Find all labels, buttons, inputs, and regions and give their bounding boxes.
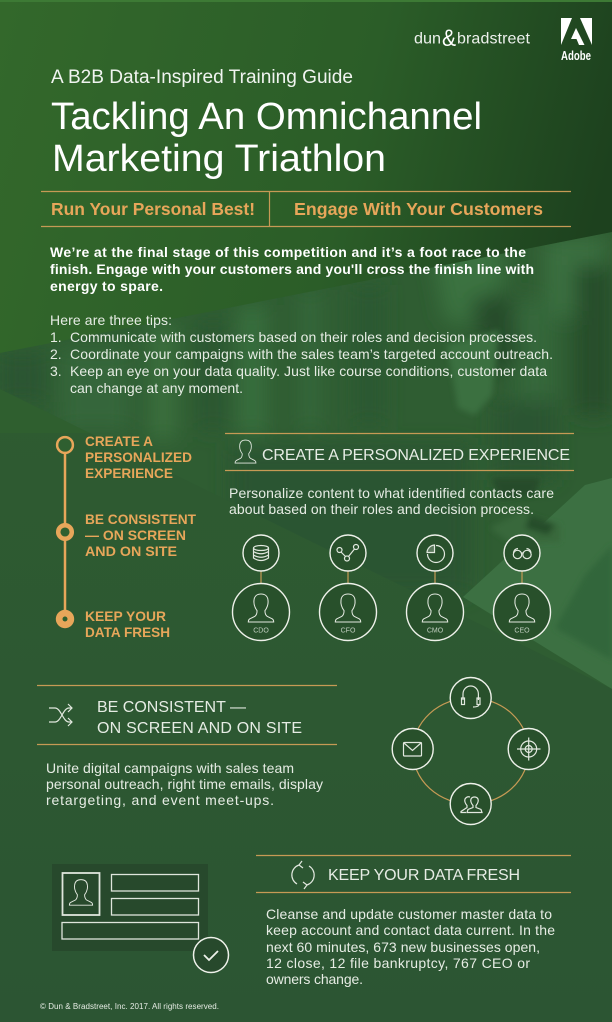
keep data fresh paragraph: Cleanse and update customer master data to: [266, 906, 552, 922]
section heading: keep data fresh: KEEP YOUR DATA FRESH: [328, 867, 520, 884]
channel ring diagram: [392, 678, 549, 824]
timeline marker 3: [56, 608, 170, 640]
intro text: We’re at the final stage of this competition and it’s a foot race to the: [50, 244, 526, 260]
keep data fresh paragraph: 12 close, 12 file bankruptcy, 767 CEO or: [266, 955, 530, 971]
role: CMO: CMO: [427, 628, 444, 634]
illustration: contact record card: [52, 864, 228, 972]
role: CDO: CDO: [253, 628, 269, 634]
tips list: Keep an eye on your data quality. Just like course conditions, customer data: [70, 363, 547, 379]
role: CEO: CEO: [514, 628, 530, 634]
tips list: 3.: [50, 363, 62, 379]
section heading: be consistent: [37, 686, 337, 744]
be consistent paragraph: personal outreach, right time emails, display: [46, 776, 323, 792]
title: [51, 96, 482, 180]
logo: dun & bradstreet: [414, 25, 531, 52]
be consistent paragraph: Unite digital campaigns with sales team: [46, 760, 294, 776]
role diagram: [232, 535, 550, 640]
timeline marker 2: BE CONSISTENT: [85, 511, 196, 527]
be consistent paragraph: retargeting, and event meet-ups.: [46, 792, 274, 808]
personalized paragraph: about based on their roles and decision process.: [229, 501, 534, 517]
section heading: personalized experience: [225, 434, 574, 470]
section heading: be consistent: ON SCREEN AND ON SITE: [97, 720, 302, 737]
timeline marker 3: KEEP YOUR: [85, 608, 166, 624]
tips list: can change at any moment.: [70, 380, 243, 396]
timeline: [56, 433, 196, 640]
icon: check mark: [194, 938, 228, 972]
keep data fresh paragraph: owners change.: [266, 971, 363, 987]
logo: dun & bradstreet: &: [442, 25, 456, 52]
role: CMO: [406, 535, 464, 640]
section heading: personalized experience: CREATE A PERSONALIZED EXPERIENCE: [262, 447, 570, 464]
background photo of runners: [0, 225, 612, 695]
timeline marker 2: — ON SCREEN: [85, 527, 186, 543]
banner: [41, 192, 571, 226]
intro text: energy to spare.: [50, 278, 163, 294]
keep data fresh paragraph: keep account and contact data current. In the: [266, 922, 555, 938]
icon: target: [508, 728, 549, 770]
icon: people: [450, 784, 491, 824]
tips list: Here are three tips:: [50, 312, 172, 328]
logo: Adobe: [561, 18, 592, 63]
tips list: 1.: [50, 329, 62, 345]
logo: dun & bradstreet: dun: [414, 30, 441, 48]
title: Tackling An Omnichannel: [51, 96, 482, 138]
intro text: [50, 244, 534, 294]
tips list: Communicate with customers based on their roles and decision processes.: [70, 329, 537, 345]
keep data fresh paragraph: next 60 minutes, 673 new businesses open,: [266, 939, 540, 955]
icon: envelope: [392, 728, 433, 770]
role: CDO: [232, 535, 290, 640]
timeline marker 1: CREATE A: [85, 433, 153, 449]
icon: refresh: [292, 861, 314, 889]
logo: Adobe: Adobe: [561, 49, 591, 63]
icon: headset: [450, 678, 491, 718]
subtitle: A B2B Data-Inspired Training Guide: [51, 67, 353, 88]
timeline marker 1: PERSONALIZED: [85, 449, 192, 465]
banner: Engage With Your Customers: [294, 199, 543, 219]
intro text: finish. Engage with your customers and you'll cross the finish line with: [50, 261, 534, 277]
role: CFO: [320, 535, 376, 640]
logo: dun & bradstreet: bradstreet: [457, 30, 531, 48]
role: CFO: CFO: [341, 628, 356, 634]
timeline marker 2: AND ON SITE: [85, 543, 177, 559]
section heading: be consistent: BE CONSISTENT —: [97, 699, 246, 716]
title: Marketing Triathlon: [52, 138, 386, 180]
be consistent paragraph: [46, 760, 323, 808]
timeline marker 1: EXPERIENCE: [85, 465, 173, 481]
role: CEO: [494, 535, 550, 640]
timeline marker 3: DATA FRESH: [85, 624, 170, 640]
tips list: [50, 312, 553, 396]
copyright: © Dun & Bradstreet, Inc. 2017. All rights reserved.: [40, 1002, 219, 1011]
banner: Run Your Personal Best!: [51, 199, 255, 219]
keep data fresh paragraph: [266, 906, 555, 987]
icon: shuffle: [49, 704, 72, 726]
personalized paragraph: [229, 485, 554, 517]
tips list: Coordinate your campaigns with the sales team’s targeted account outreach.: [70, 346, 553, 362]
timeline marker 2: [58, 511, 196, 559]
tips list: 2.: [50, 346, 62, 362]
timeline marker 1: [57, 433, 192, 481]
personalized paragraph: Personalize content to what identified contacts care: [229, 485, 554, 501]
section heading: keep data fresh: [256, 856, 571, 892]
